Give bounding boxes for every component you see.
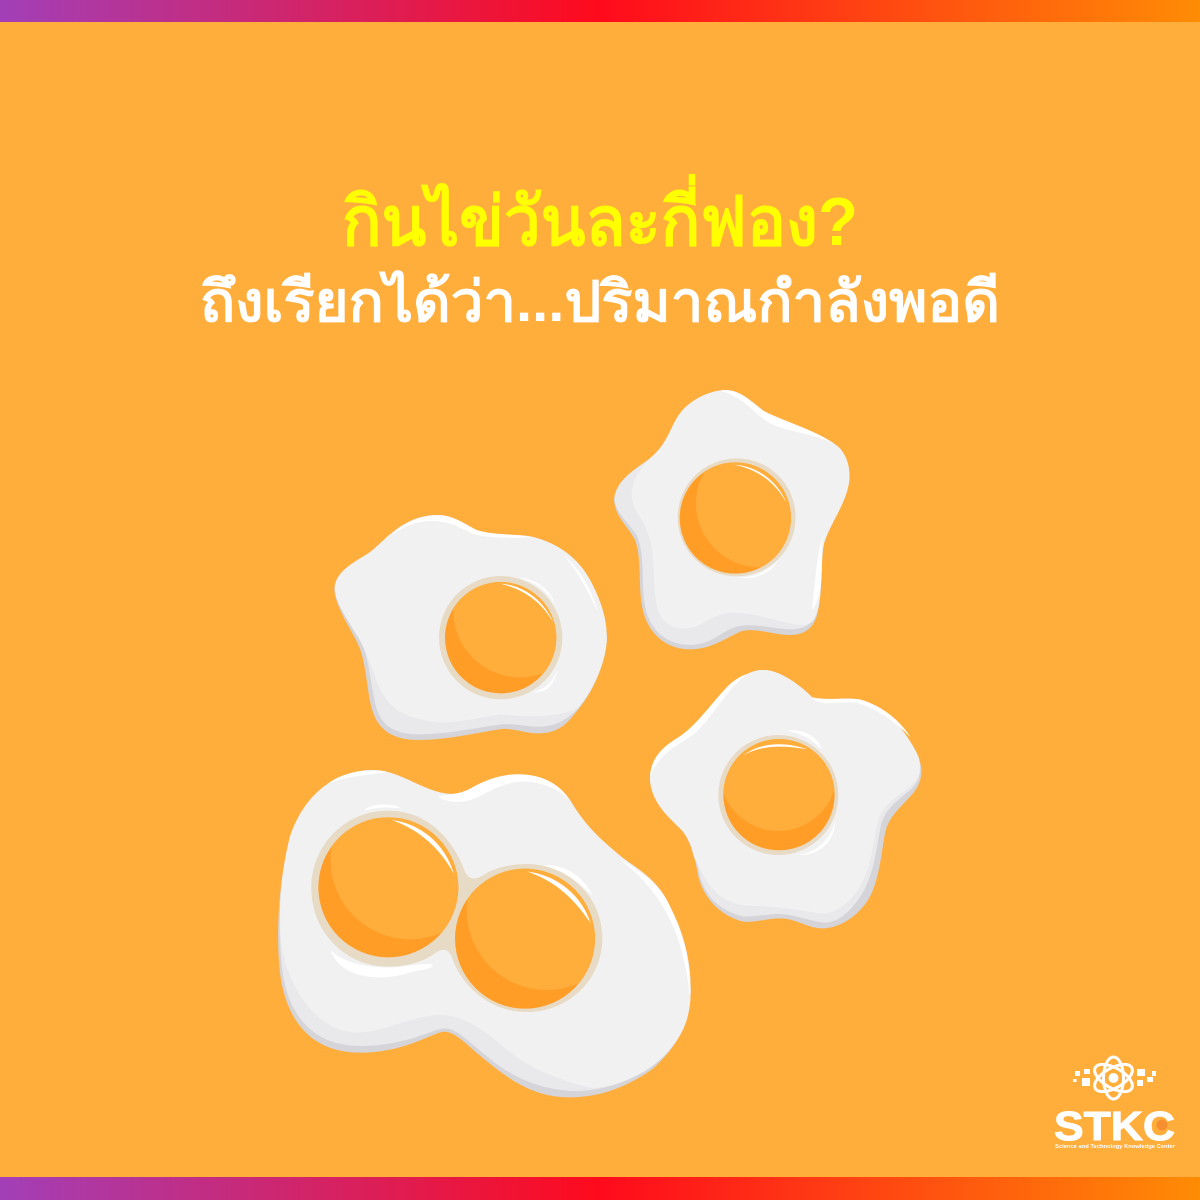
highlight: egg white edges	[650, 674, 911, 855]
logo wordmark: STKC	[1054, 1103, 1175, 1149]
bottom gradient bar	[0, 1177, 1200, 1200]
logo tagline: Science and Technology Knowledge Center	[1055, 1144, 1176, 1150]
highlight: egg white edges	[392, 516, 598, 692]
subtitle: ถึงเรียกได้ว่า...ปริมาณกำลังพอดี	[200, 269, 1000, 333]
yolk	[445, 582, 556, 693]
highlight: egg white edges	[328, 771, 690, 997]
logo: STKC	[1054, 1057, 1176, 1150]
logo dot	[1156, 1120, 1168, 1130]
yolk	[680, 462, 791, 574]
yolk ring	[718, 735, 838, 855]
egg: middle right	[650, 670, 921, 928]
yolk	[723, 739, 835, 850]
highlight: egg white edges	[720, 390, 833, 610]
yolk highlight	[734, 465, 787, 503]
yolk highlight	[500, 584, 553, 622]
yolk ring: joined pair	[311, 811, 602, 1012]
yolk: left	[318, 817, 458, 957]
yolk highlight	[743, 744, 807, 756]
egg: double yolk	[278, 770, 691, 1097]
yolk ring	[439, 576, 562, 699]
egg: top right	[614, 390, 849, 649]
title: กินไข่วันละกี่ฟอง?	[342, 173, 858, 260]
yolk ring	[678, 458, 796, 576]
yolk: right	[455, 869, 595, 1009]
yolk highlights	[392, 820, 591, 923]
icon: atom	[1073, 1057, 1156, 1099]
top gradient bar	[0, 0, 1200, 22]
egg: middle left	[334, 515, 607, 740]
